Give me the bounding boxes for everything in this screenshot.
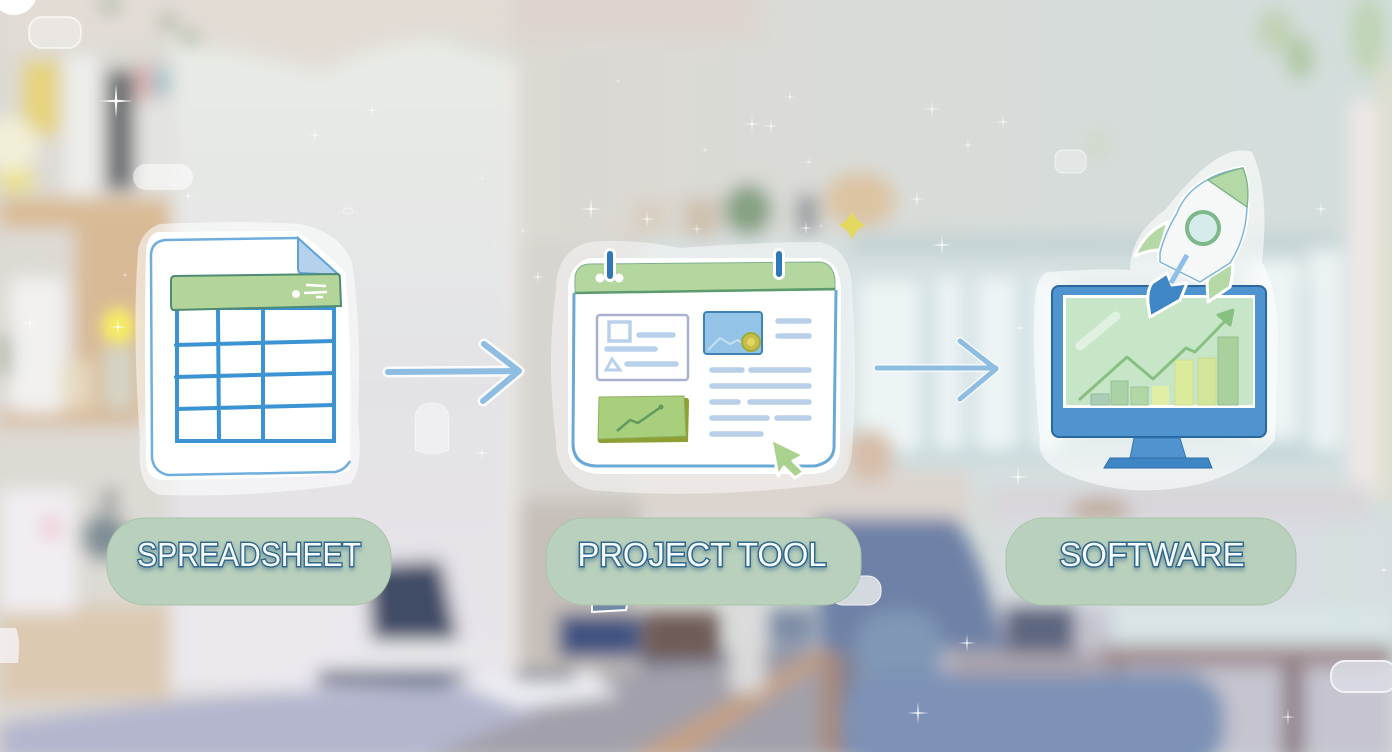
card: image (704, 312, 762, 354)
icon: project tool window (551, 241, 855, 494)
pill label: project tool: PROJECT TOOL (578, 536, 826, 573)
fins (1135, 222, 1168, 256)
pill label: project tool (546, 518, 861, 605)
text lines (712, 321, 809, 434)
rocket nose (1208, 168, 1248, 207)
pill label: spreadsheet (107, 518, 391, 605)
icon: spreadsheet (135, 222, 360, 496)
table grid (176, 308, 334, 441)
binder rings (610, 254, 779, 276)
desk with items (0, 655, 840, 752)
floor and desks (640, 650, 860, 752)
pill label: spreadsheet: SPREADSHEET (137, 536, 361, 573)
card: shapes (597, 315, 688, 380)
bar chart (1091, 337, 1238, 405)
right background (1000, 520, 1392, 620)
monitor body (1052, 286, 1266, 437)
hanging plants (159, 16, 177, 28)
window frame (573, 290, 836, 466)
arrow: spreadsheet to project tool (388, 344, 519, 401)
growth arrow (1079, 310, 1233, 400)
rocket (1135, 168, 1248, 317)
pill label: software (1006, 518, 1296, 605)
arrow: project tool to software (877, 341, 996, 399)
monitor stand (1130, 438, 1186, 458)
cursor (771, 439, 804, 478)
left pillar edge (508, 60, 518, 700)
mid-floor people and plants (640, 470, 970, 520)
back shelf decor (630, 200, 670, 242)
page fold (298, 238, 339, 275)
shelf objects (22, 60, 60, 135)
wall bottom (170, 600, 400, 690)
shelves (0, 50, 172, 690)
windows (640, 238, 1360, 488)
pill label: software: SOFTWARE (1060, 536, 1244, 573)
rocket body (1160, 168, 1247, 282)
chairs (815, 518, 1005, 650)
window header (575, 262, 835, 293)
ceiling and center wall (510, 0, 1392, 240)
icon: monitor with rocket (1034, 150, 1278, 490)
left wall (170, 30, 510, 690)
icon: yellow diamond sparkle (839, 211, 865, 240)
flame (1148, 273, 1187, 317)
card: trend chart (598, 396, 689, 443)
porthole (1187, 212, 1219, 244)
green header band (171, 274, 341, 310)
